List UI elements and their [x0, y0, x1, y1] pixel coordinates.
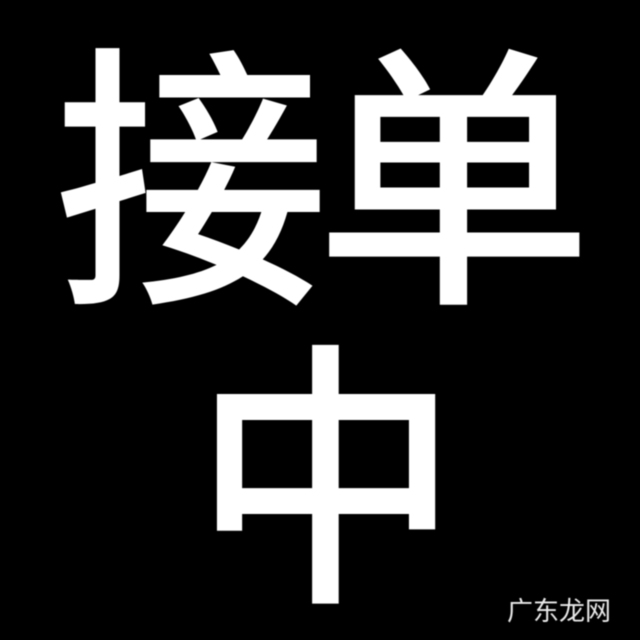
character: 中: 中	[192, 329, 460, 640]
character: 接: 接	[54, 32, 329, 341]
character: 单: 单	[315, 30, 593, 341]
watermark: 广东龙网	[507, 596, 611, 626]
